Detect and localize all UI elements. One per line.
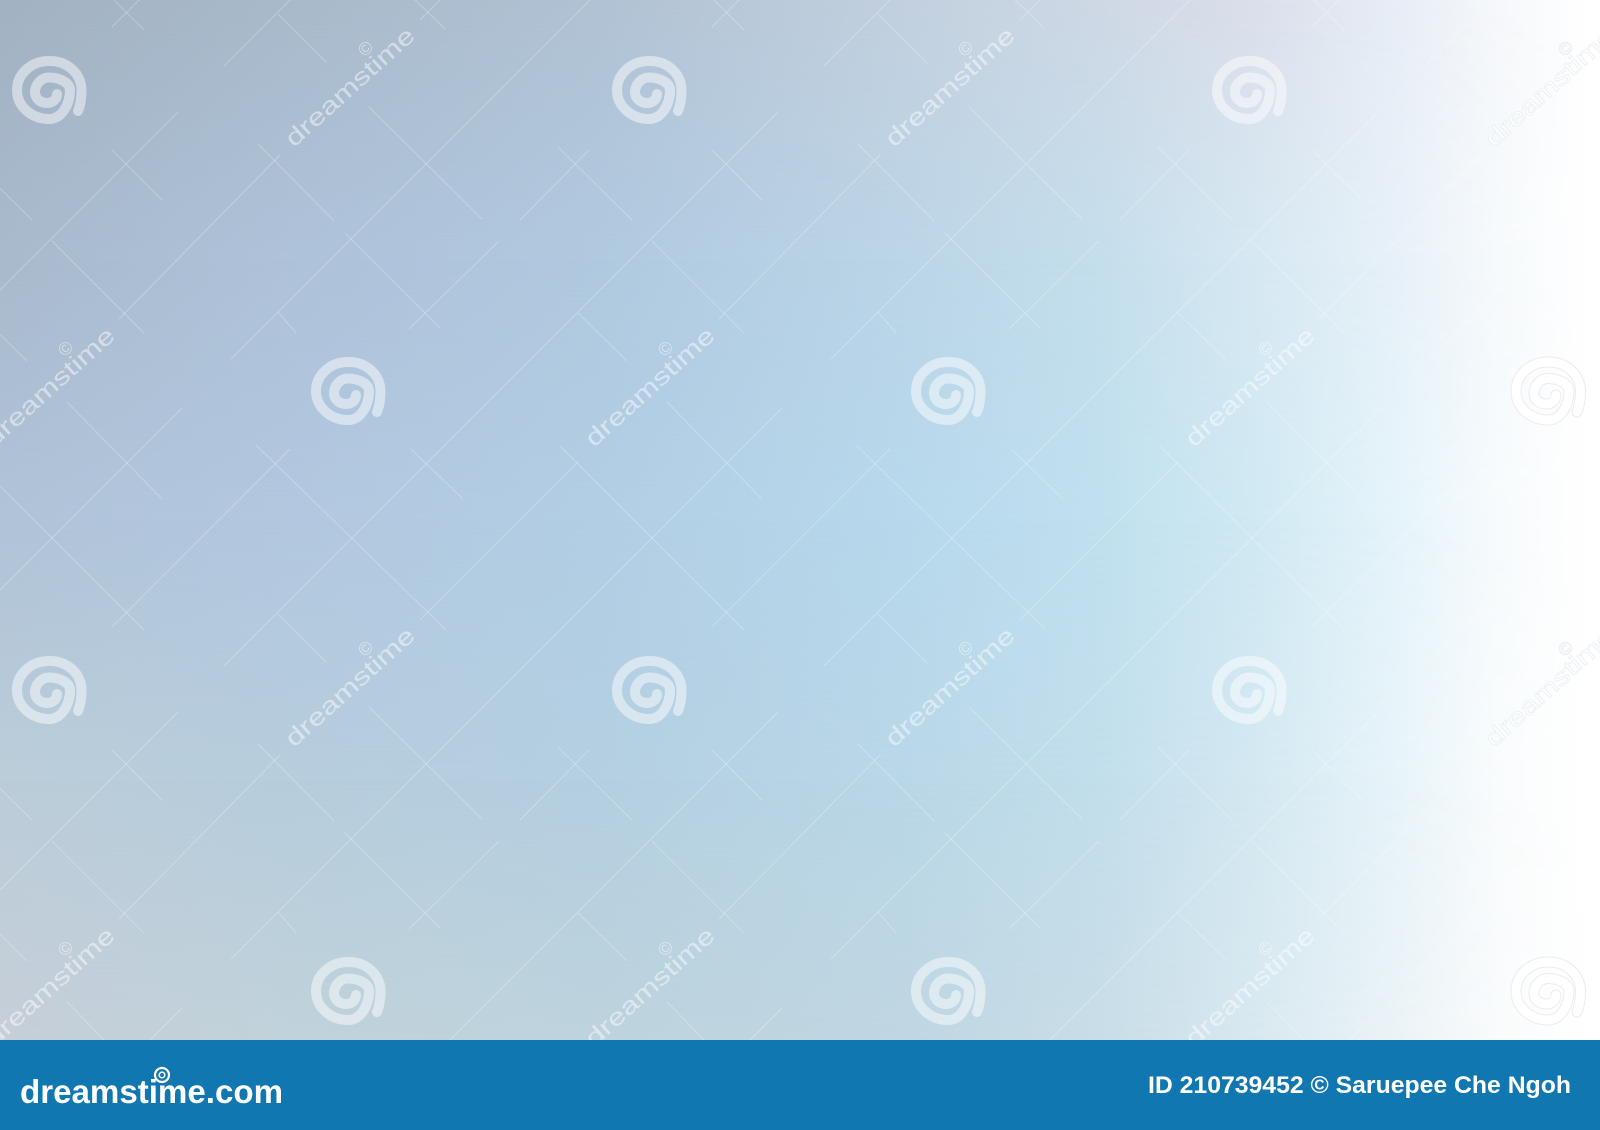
watermark wordmarks: © [1254, 337, 1277, 360]
watermark wordmarks: dreamstime [880, 22, 1021, 152]
watermark wordmarks: © [654, 937, 677, 960]
watermark wordmarks: dreamstime [580, 322, 721, 452]
watermark wordmarks: © [54, 937, 77, 960]
watermark wordmarks: dreamstime [1180, 322, 1321, 452]
watermark wordmarks: © [354, 37, 377, 60]
watermark wordmarks: © [954, 37, 977, 60]
watermark wordmarks: © [954, 637, 977, 660]
watermark wordmarks: dreamstime [1480, 622, 1600, 752]
watermark wordmarks: © [1554, 637, 1577, 660]
watermark wordmarks: dreamstime [880, 622, 1021, 752]
footer logo: dreamstime.com: dreamstime.com [20, 1073, 283, 1110]
watermark wordmarks: dreamstime [280, 22, 421, 152]
footer bar [0, 1040, 1600, 1130]
watermark wordmarks: © [54, 337, 77, 360]
watermark wordmarks: © [354, 637, 377, 660]
watermark wordmarks: © [1554, 37, 1577, 60]
watermark wordmarks: © [1254, 937, 1277, 960]
image credit: ID 210739452 © Saruepee Che Ngoh [1148, 1072, 1571, 1099]
watermark wordmarks: dreamstime [1480, 22, 1600, 152]
watermark wordmarks: dreamstime [280, 622, 421, 752]
watermark wordmarks: © [654, 337, 677, 360]
